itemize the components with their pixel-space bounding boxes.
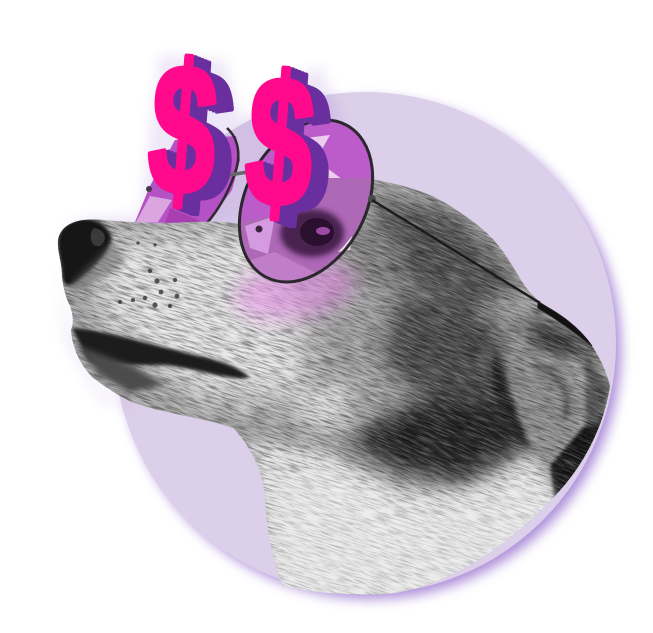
neck highlight — [268, 465, 560, 600]
fur texture — [50, 175, 615, 598]
snout light fur — [100, 225, 310, 400]
ear — [492, 350, 612, 500]
dollar sign right: $ — [250, 40, 332, 251]
eye — [280, 209, 344, 257]
dollar sign left: $ — [142, 24, 224, 235]
left glasses lens — [135, 127, 240, 223]
dollar sign right: $ — [243, 37, 325, 248]
glasses temple arm — [372, 200, 592, 346]
illustration: dog wearing dollar sign glasses — [58, 54, 630, 608]
dollar sign left: $ — [146, 25, 228, 236]
dollar sign left: $ — [156, 29, 238, 240]
dog head and neck — [58, 180, 610, 594]
head mid and dark fur — [295, 200, 600, 480]
background circle with purple shadow — [114, 92, 621, 599]
purple glow behind dog and dollar signs — [60, 55, 340, 410]
glasses bridge — [223, 172, 248, 188]
dollar sign right: $ — [246, 38, 329, 249]
whisker spots — [118, 241, 179, 308]
pink blush on cheek — [231, 252, 359, 328]
dollar sign right: $ — [256, 42, 339, 253]
dollar sign left: $ — [159, 30, 242, 241]
neck white fur — [250, 440, 570, 610]
dollar sign right: $ — [239, 36, 321, 247]
right glasses lens — [238, 118, 376, 284]
dollar sign left: $ — [149, 26, 232, 237]
nose — [58, 219, 125, 292]
dollar sign right: $ — [253, 41, 335, 252]
mouth line and lower jaw — [72, 328, 250, 392]
dollar sign left: $ — [153, 28, 235, 239]
